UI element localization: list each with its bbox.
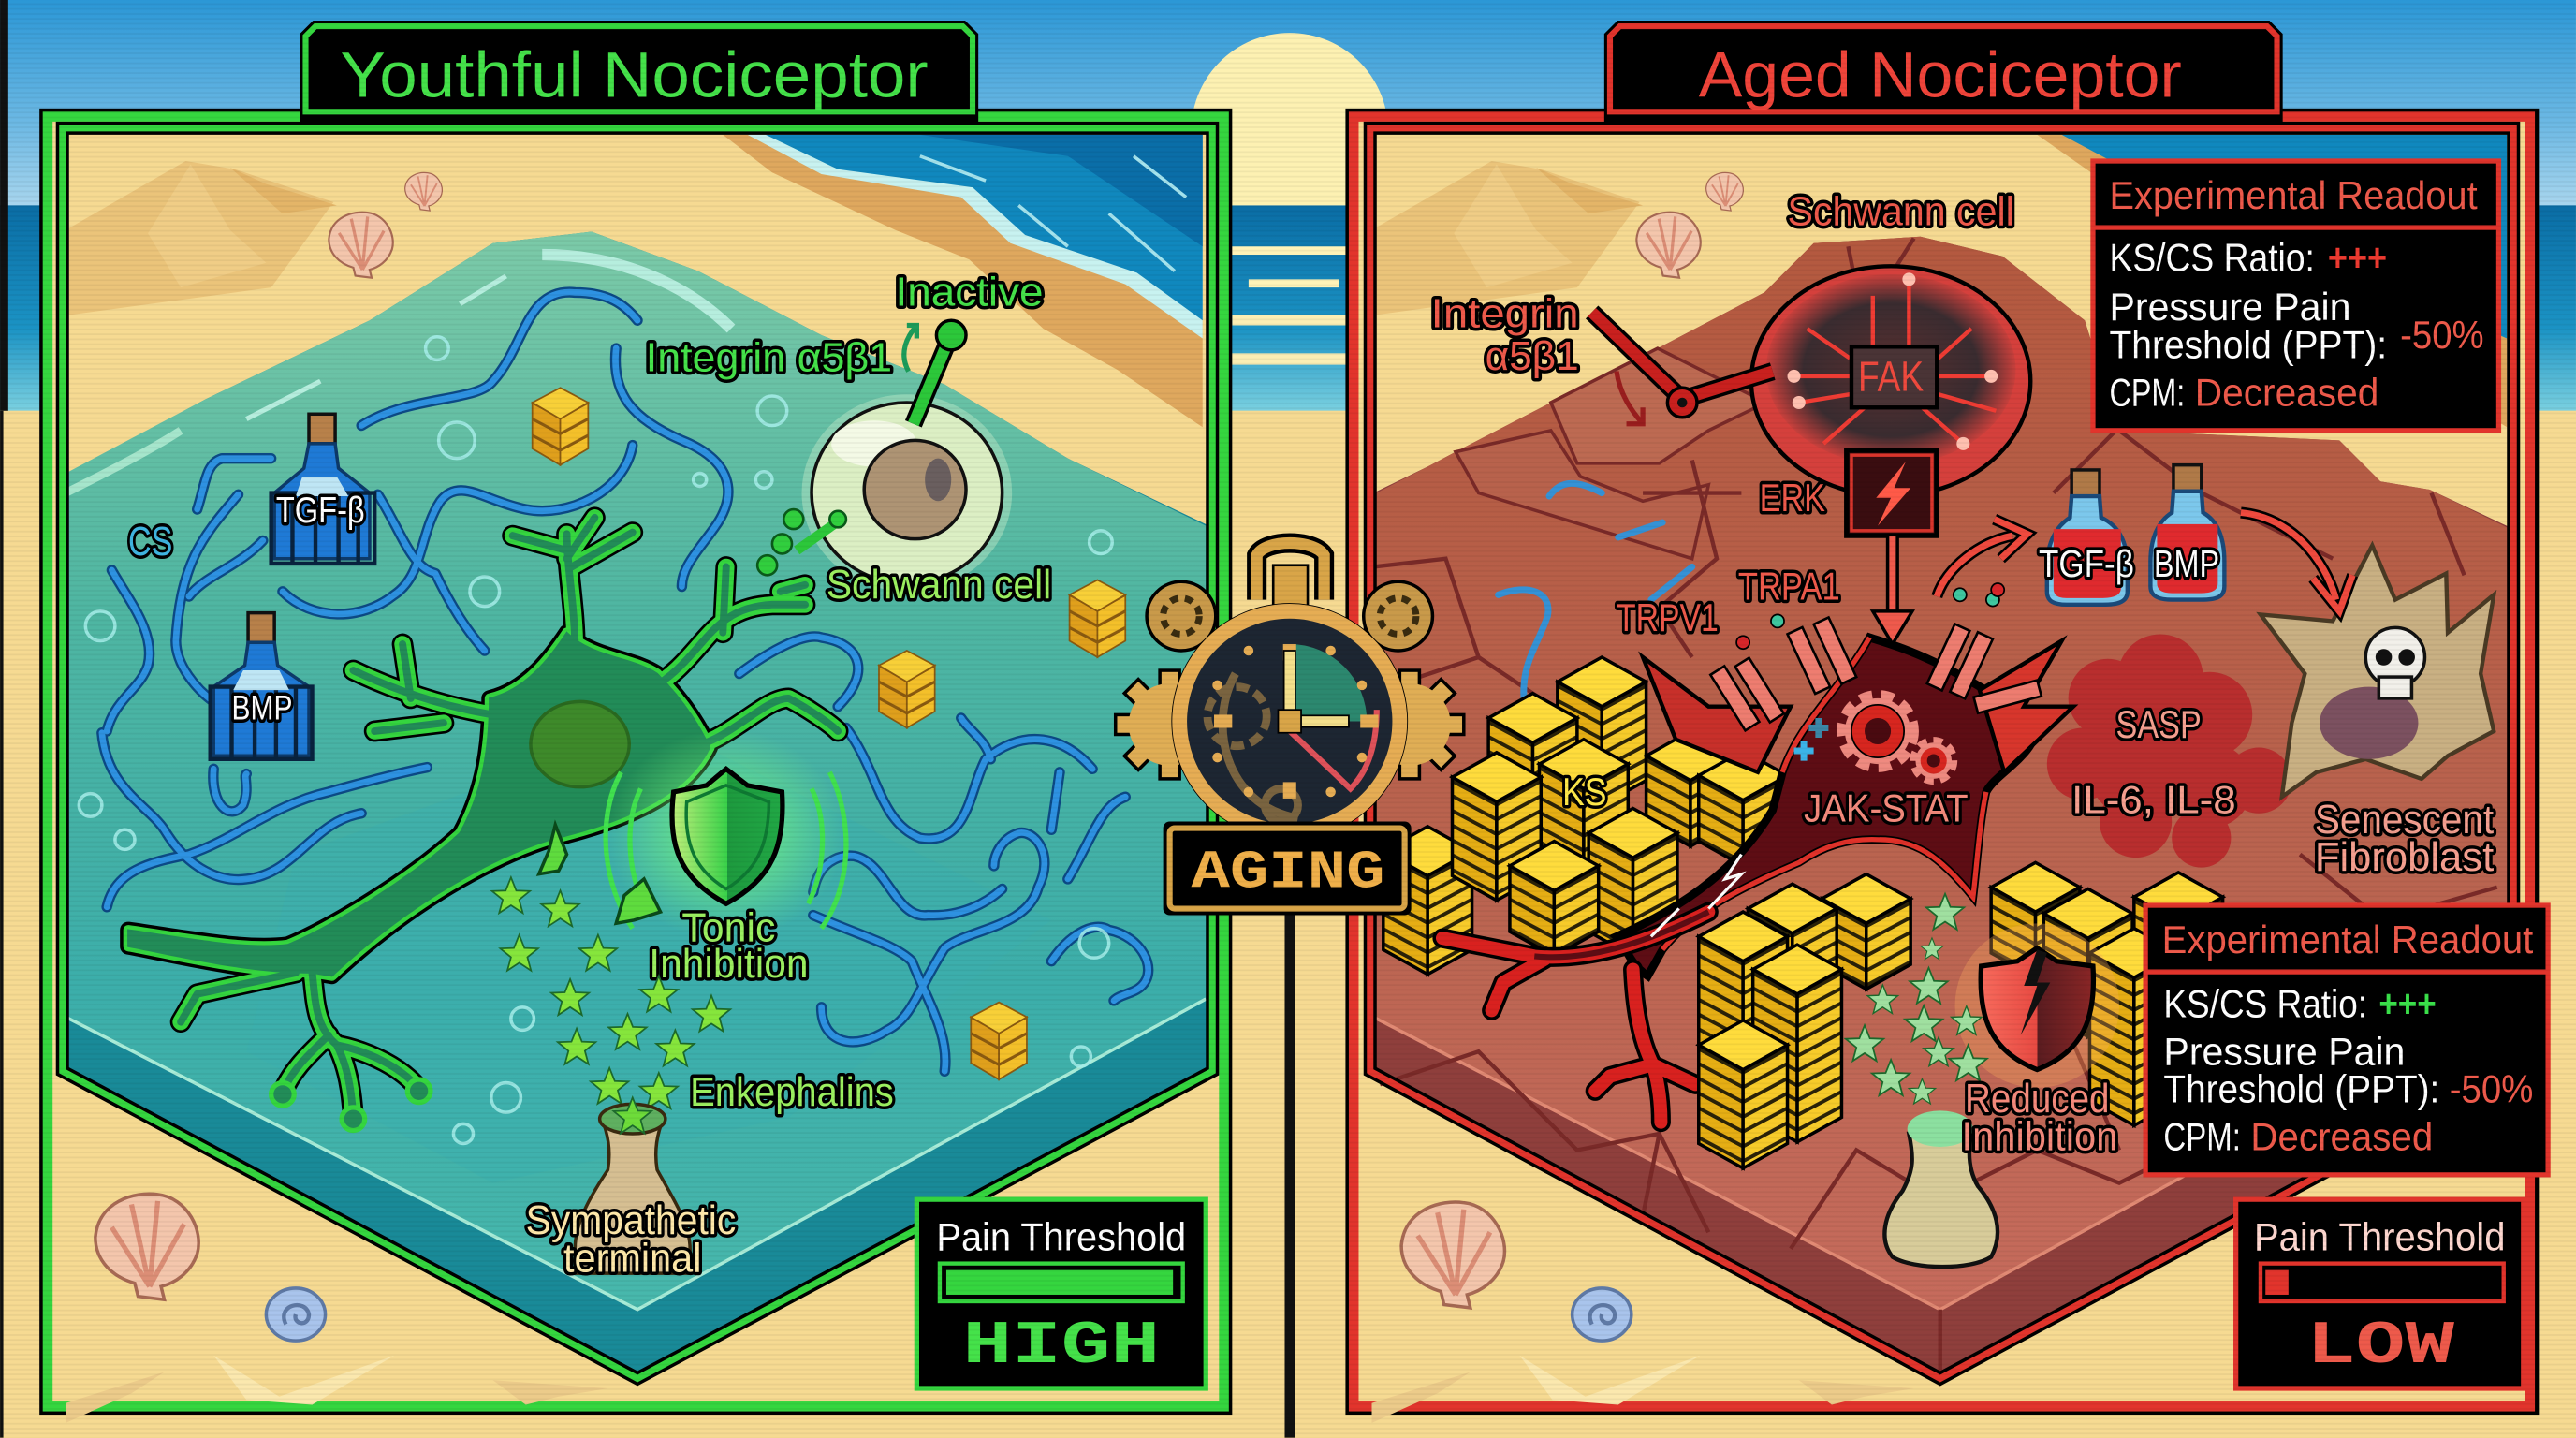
experimental readout bottom: KS/CS Ratio: bbox=[2163, 981, 2367, 1025]
label Reduced Inhibition bbox=[1962, 1076, 2117, 1160]
arrow ERK to neuron bbox=[1873, 536, 1912, 644]
AGING plate: AGING bbox=[1191, 844, 1385, 904]
panel frame and sand bbox=[39, 109, 1232, 1423]
label TRPV1: TRPV1 bbox=[1617, 595, 1719, 639]
gold KS stacks back cluster bbox=[1383, 657, 1788, 975]
experimental readout top: Decreased bbox=[2195, 370, 2378, 414]
panel: youthful nociceptor bbox=[39, 26, 1232, 1423]
shells bbox=[95, 172, 442, 1341]
experimental readout bottom bbox=[2145, 905, 2548, 1175]
label IL-6 IL-8: IL-6, IL-8 bbox=[2071, 778, 2236, 822]
title tab youthful: Youthful Nociceptor bbox=[340, 39, 929, 111]
small receptor stars bbox=[539, 825, 661, 923]
cracked rock mesa bbox=[1370, 237, 2510, 1378]
clock hands bbox=[1278, 651, 1349, 733]
label TRPA1: TRPA1 bbox=[1738, 565, 1840, 609]
aging stopwatch bbox=[1116, 543, 1464, 916]
label CS: CS bbox=[128, 519, 172, 565]
icon: caged bottle TGF-β bbox=[271, 414, 374, 564]
icon: caged bottle BMP: BMP bbox=[232, 689, 292, 727]
FAK sphere bbox=[1751, 266, 2030, 496]
experimental readout top: KS/CS Ratio: bbox=[2110, 236, 2315, 280]
experimental readout top: Pressure Pain bbox=[2110, 285, 2351, 329]
icon: bottle BMP red: BMP bbox=[2154, 542, 2219, 585]
label Integrin aged: Integrin bbox=[1431, 290, 1579, 336]
icon: caged bottle BMP bbox=[211, 613, 313, 759]
neuron aged bbox=[1442, 638, 2073, 1123]
faded gears bbox=[1208, 674, 1298, 822]
ocean corner aged bbox=[2037, 135, 2507, 427]
ion particles bbox=[1736, 583, 2004, 761]
pain threshold LOW: LOW bbox=[2306, 1313, 2454, 1381]
gold KS stacks front cluster bbox=[1699, 862, 2223, 1168]
label Integrin youthful: Integrin α5β1 bbox=[646, 335, 892, 381]
label Schwann cell youthful: Schwann cell bbox=[827, 562, 1051, 608]
enkephalin stars bbox=[492, 877, 730, 1108]
sun bbox=[1191, 33, 1388, 205]
experimental readout top bbox=[2093, 161, 2498, 431]
ion channels bbox=[1710, 617, 2042, 730]
experimental readout top: -50% bbox=[2400, 313, 2484, 357]
experimental readout top: Experimental Readout bbox=[2110, 173, 2478, 217]
curved arrow to fibroblast bbox=[2241, 513, 2352, 611]
vase aged bbox=[1884, 1110, 1998, 1267]
panel frame and sand bbox=[1345, 109, 2539, 1423]
experimental readout bottom: Pressure Pain bbox=[2163, 1029, 2405, 1073]
pain threshold HIGH: Pain Threshold bbox=[936, 1215, 1186, 1259]
center divider line bbox=[1284, 912, 1295, 1438]
pain threshold HIGH: HIGH bbox=[963, 1313, 1160, 1381]
hour markers bbox=[1212, 644, 1379, 799]
crown loop bbox=[1257, 543, 1325, 614]
small arrow integrin bbox=[904, 325, 916, 372]
label Tonic Inhibition: Inhibition bbox=[649, 941, 809, 987]
label Senescent Fibroblast: Senescent bbox=[2315, 797, 2494, 843]
experimental readout top: +++ bbox=[2328, 236, 2387, 280]
icon: bottle BMP red bbox=[2150, 465, 2224, 600]
bubbles bbox=[79, 337, 1112, 1143]
label Sympathetic terminal: terminal bbox=[564, 1235, 701, 1281]
pain threshold LOW bbox=[2236, 1199, 2524, 1388]
ERK lightning box bbox=[1847, 450, 1937, 536]
panel: aged nociceptor bbox=[1345, 26, 2548, 1423]
faded enkephalin stars bbox=[1846, 894, 1987, 1104]
gold stacks small bbox=[533, 388, 1125, 1079]
shells aged bbox=[1401, 172, 1743, 1341]
icon: skull bbox=[2365, 627, 2424, 698]
label Schwann cell aged: Schwann cell bbox=[1788, 188, 2014, 234]
label Sympathetic terminal bbox=[526, 1197, 736, 1281]
label Sympathetic terminal: Sympathetic bbox=[526, 1197, 736, 1243]
experimental readout bottom: +++ bbox=[2378, 981, 2437, 1025]
secreted green particles bbox=[757, 509, 846, 575]
pain threshold HIGH bbox=[916, 1199, 1206, 1388]
icon: bottle TGF-β red: TGF-β bbox=[2039, 542, 2134, 585]
pain threshold LOW: Pain Threshold bbox=[2254, 1215, 2505, 1259]
label ERK: ERK bbox=[1760, 476, 1825, 520]
red arc bbox=[1284, 710, 1377, 788]
label SASP: SASP bbox=[2116, 702, 2202, 746]
collagen fibres CS bbox=[102, 292, 1149, 1071]
icon: JAK-STAT gears bbox=[1845, 698, 1952, 779]
gel matrix bbox=[63, 231, 1209, 1378]
fragmented CS fibres bbox=[1499, 483, 1692, 707]
experimental readout top: CPM: bbox=[2110, 370, 2185, 414]
icon: bottle TGF-β red bbox=[2039, 470, 2134, 605]
label Reduced Inhibition: Reduced bbox=[1965, 1076, 2110, 1122]
schwann cell youthful bbox=[802, 320, 1012, 592]
title tab aged: Aged Nociceptor bbox=[1699, 39, 2182, 111]
label Senescent Fibroblast bbox=[2315, 797, 2494, 880]
senescent fibroblast bbox=[2261, 546, 2494, 797]
inner hexagon border bbox=[63, 128, 1212, 1378]
experimental readout bottom: Experimental Readout bbox=[2162, 917, 2534, 961]
SASP cloud bbox=[2047, 634, 2291, 868]
label FAK: FAK bbox=[1858, 353, 1924, 401]
label Integrin aged: α5β1 bbox=[1486, 333, 1579, 379]
experimental readout bottom: Decreased bbox=[2250, 1115, 2433, 1159]
neuron youthful bbox=[128, 518, 838, 1130]
label JAK-STAT: JAK-STAT bbox=[1804, 786, 1969, 830]
label Reduced Inhibition: Inhibition bbox=[1962, 1114, 2117, 1160]
experimental readout top: Threshold (PPT): bbox=[2110, 323, 2387, 367]
experimental readout bottom: CPM: bbox=[2163, 1115, 2241, 1159]
green sector bbox=[1290, 644, 1367, 721]
ocean corner bbox=[723, 135, 1203, 427]
label KS: KS bbox=[1562, 770, 1606, 814]
label Inactive: Inactive bbox=[896, 269, 1044, 315]
broken shield bbox=[1955, 923, 2119, 1088]
integrin bent red bbox=[1592, 312, 1773, 424]
inner hexagon border aged bbox=[1370, 128, 2513, 1378]
title tab aged bbox=[1610, 26, 2277, 118]
integrin inactive stick bbox=[914, 342, 948, 424]
sympathetic terminal vase bbox=[575, 1097, 690, 1273]
experimental readout bottom: -50% bbox=[2450, 1067, 2533, 1111]
label Tonic Inhibition bbox=[649, 905, 809, 987]
label Integrin aged bbox=[1431, 290, 1579, 379]
clock body bbox=[1171, 603, 1408, 840]
label Senescent Fibroblast: Fibroblast bbox=[2315, 834, 2494, 880]
label Tonic Inhibition: Tonic bbox=[681, 905, 775, 951]
tonic inhibition shield bbox=[606, 729, 846, 940]
curved arrow to bottles bbox=[1937, 520, 2027, 596]
icon: clock gears bbox=[1116, 581, 1464, 779]
AGING plate bbox=[1164, 822, 1412, 916]
experimental readout bottom: Threshold (PPT): bbox=[2163, 1067, 2439, 1111]
icon: caged bottle TGF-β: TGF-β bbox=[276, 491, 365, 531]
title tab youthful bbox=[305, 26, 973, 118]
label Enkephalins: Enkephalins bbox=[690, 1069, 894, 1115]
